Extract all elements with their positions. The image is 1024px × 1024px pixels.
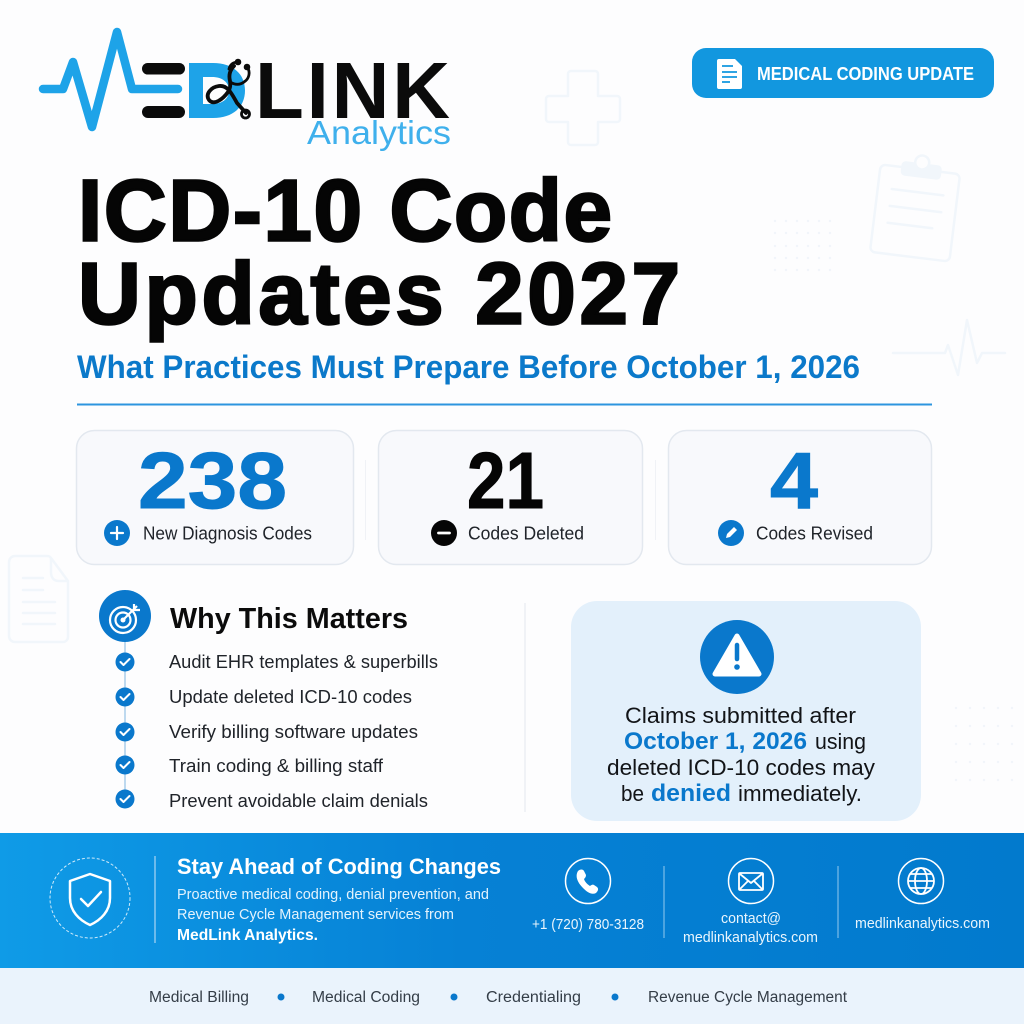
stat label: New Diagnosis Codes [143, 524, 312, 544]
icon: faint clipboard [870, 151, 962, 262]
services strip: Medical Billing [149, 989, 249, 1006]
logo: MedLink Analytics [43, 32, 451, 151]
stat number 21: 21 [467, 436, 544, 525]
icon: shield [50, 858, 130, 938]
logo stethoscope [208, 59, 250, 118]
section: why this matters [99, 590, 438, 811]
logo E bars [142, 63, 185, 118]
callout text: deleted ICD-10 codes may [607, 755, 875, 780]
checklist: Prevent avoidable claim denials [169, 791, 428, 811]
checklist: Verify billing software updates [169, 722, 418, 742]
logo pulse line [43, 32, 178, 127]
stat label: Codes Deleted [468, 524, 584, 544]
services strip: Revenue Cycle Management [648, 989, 848, 1006]
stat number 4: 4 [770, 436, 819, 525]
icon: faint document [9, 556, 68, 642]
check icons [116, 652, 134, 808]
stat card: codes deleted [378, 430, 642, 564]
footer description: MedLink Analytics. [177, 927, 318, 944]
stat card: codes revised [668, 430, 932, 564]
contact: email [683, 858, 818, 946]
footer description: Proactive medical coding, denial prevention, and [177, 886, 489, 903]
services strip: Credentialing [486, 989, 581, 1006]
icon: warning triangle [700, 620, 774, 694]
footer description: Revenue Cycle Management services from [177, 906, 454, 923]
title line 1: ICD-10 Code [78, 162, 612, 260]
callout text: immediately. [738, 781, 862, 806]
contact: phone: +1 (720) 780-3128 [532, 916, 644, 933]
contact: email: contact@ [721, 910, 781, 927]
stat card: new diagnosis codes [76, 430, 354, 564]
callout text: using [815, 729, 866, 754]
services strip: Medical Coding [312, 989, 420, 1006]
checklist: Update deleted ICD-10 codes [169, 687, 412, 707]
checklist: Train coding & billing staff [169, 756, 384, 776]
services strip [0, 968, 1024, 1024]
checklist [169, 652, 438, 811]
callout text: October 1, 2026 [624, 728, 807, 755]
faint dot grid top right [774, 220, 831, 271]
checklist: Audit EHR templates & superbills [169, 652, 438, 672]
faint dot grid lower right [955, 707, 1013, 781]
contact: website: medlinkanalytics.com [855, 915, 990, 932]
footer heading: Stay Ahead of Coding Changes [177, 854, 501, 879]
icon: faint pulse line [893, 320, 1005, 375]
icon: plus [104, 520, 130, 546]
badge: medical coding update [692, 48, 994, 98]
callout text: be [621, 781, 644, 806]
icon: target [99, 590, 151, 642]
icon: minus [431, 520, 457, 546]
logo D letter [189, 63, 245, 118]
heading: Why This Matters [170, 603, 408, 635]
callout text [607, 703, 875, 807]
subtitle: What Practices Must Prepare Before October 1, 2026 [77, 349, 860, 385]
icon: pencil [718, 520, 744, 546]
title line 2: Updates 2027 [78, 246, 680, 342]
icon: faint medical cross [546, 71, 620, 145]
badge label: MEDICAL CODING UPDATE [757, 63, 974, 84]
footer banner [0, 833, 1024, 968]
stat number 238: 238 [138, 436, 287, 525]
contact: phone [532, 858, 644, 933]
logo Analytics wordmark: Analytics [307, 114, 451, 151]
logo LINK wordmark: LINK [255, 46, 450, 135]
decorative background icons [9, 71, 1005, 642]
stat label: Codes Revised [756, 524, 873, 544]
title [78, 162, 680, 342]
contact: website [855, 858, 990, 932]
callout text: denied [651, 780, 731, 807]
icon: document [717, 59, 742, 89]
callout: denial warning [571, 601, 921, 821]
footer description [177, 886, 489, 944]
callout text: Claims submitted after [625, 703, 856, 728]
contact: email: medlinkanalytics.com [683, 929, 818, 946]
